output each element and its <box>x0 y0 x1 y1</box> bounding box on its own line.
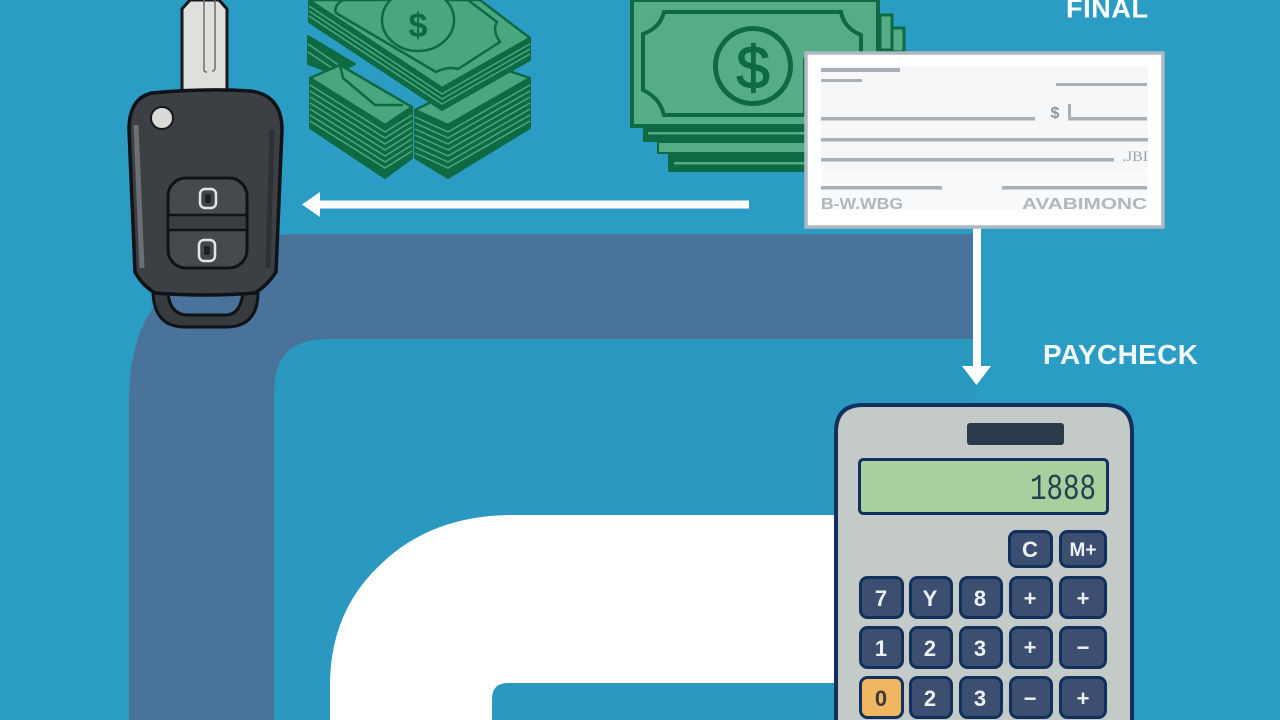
calculator key labels: 7 <box>875 586 887 611</box>
middle left layer <box>308 36 355 74</box>
calculator speaker <box>967 423 1064 445</box>
fob button panel <box>168 178 247 268</box>
icon: calculator <box>836 405 1132 720</box>
check cents: .JBI <box>1122 149 1148 165</box>
display readout: 1888 <box>1030 469 1096 510</box>
calculator key labels: + <box>1077 586 1089 611</box>
arrow: check to calculator <box>962 228 991 385</box>
key blade <box>182 0 227 92</box>
front bill <box>632 0 878 126</box>
calculator key labels: C <box>1022 537 1038 562</box>
calculator key labels: Y <box>923 586 938 611</box>
check lines <box>821 68 1148 190</box>
front bill dollar seal <box>716 28 790 104</box>
calculator key labels <box>875 537 1096 711</box>
fob button glyph: upper <box>200 189 216 208</box>
bottom right stack <box>415 68 530 178</box>
bottom left stack <box>310 65 412 178</box>
calculator key labels: 8 <box>974 586 986 611</box>
icon: stacked cash <box>308 0 530 178</box>
fob button glyph: lower <box>199 240 215 261</box>
calculator key labels: 0 <box>875 686 887 711</box>
top stack: $ <box>409 7 428 45</box>
icon: paper check <box>806 53 1163 227</box>
check amount symbol: $ <box>1051 105 1060 122</box>
check date label: B-W.WBG <box>821 196 903 213</box>
white rounded path <box>330 515 840 720</box>
key ring loop <box>153 292 258 327</box>
calculator key labels: 2 <box>924 686 936 711</box>
calculator key labels: M+ <box>1070 540 1096 561</box>
calculator key labels: 1 <box>875 636 887 661</box>
inner panel background <box>274 339 975 720</box>
calculator key labels: + <box>1024 635 1036 660</box>
fob indicator light <box>151 107 173 129</box>
calculator key labels: 3 <box>974 636 986 661</box>
calculator key labels: − <box>1077 635 1089 660</box>
calculator display <box>860 460 1108 514</box>
calculator key labels: 2 <box>924 636 936 661</box>
check signature label: AVABIMONC <box>1022 196 1148 213</box>
icon: banknote stack <box>632 0 904 172</box>
top bill dollar seal <box>382 0 454 51</box>
top stack <box>309 0 530 110</box>
blue-gray path band <box>129 234 975 720</box>
back bills <box>880 15 904 52</box>
calculator key labels: − <box>1024 686 1036 711</box>
calculator key labels: + <box>1077 686 1089 711</box>
calculator key labels: 3 <box>974 686 986 711</box>
calculator body <box>836 405 1132 720</box>
icon: banknote stack: $ <box>736 34 770 101</box>
calculator key labels: + <box>1024 586 1036 611</box>
label: PAYCHECK: PAYCHECK <box>1043 339 1198 370</box>
fob body <box>129 90 282 295</box>
icon: car key fob <box>129 0 282 327</box>
calculator keys <box>860 532 1106 718</box>
arrow: check to key <box>302 192 749 217</box>
